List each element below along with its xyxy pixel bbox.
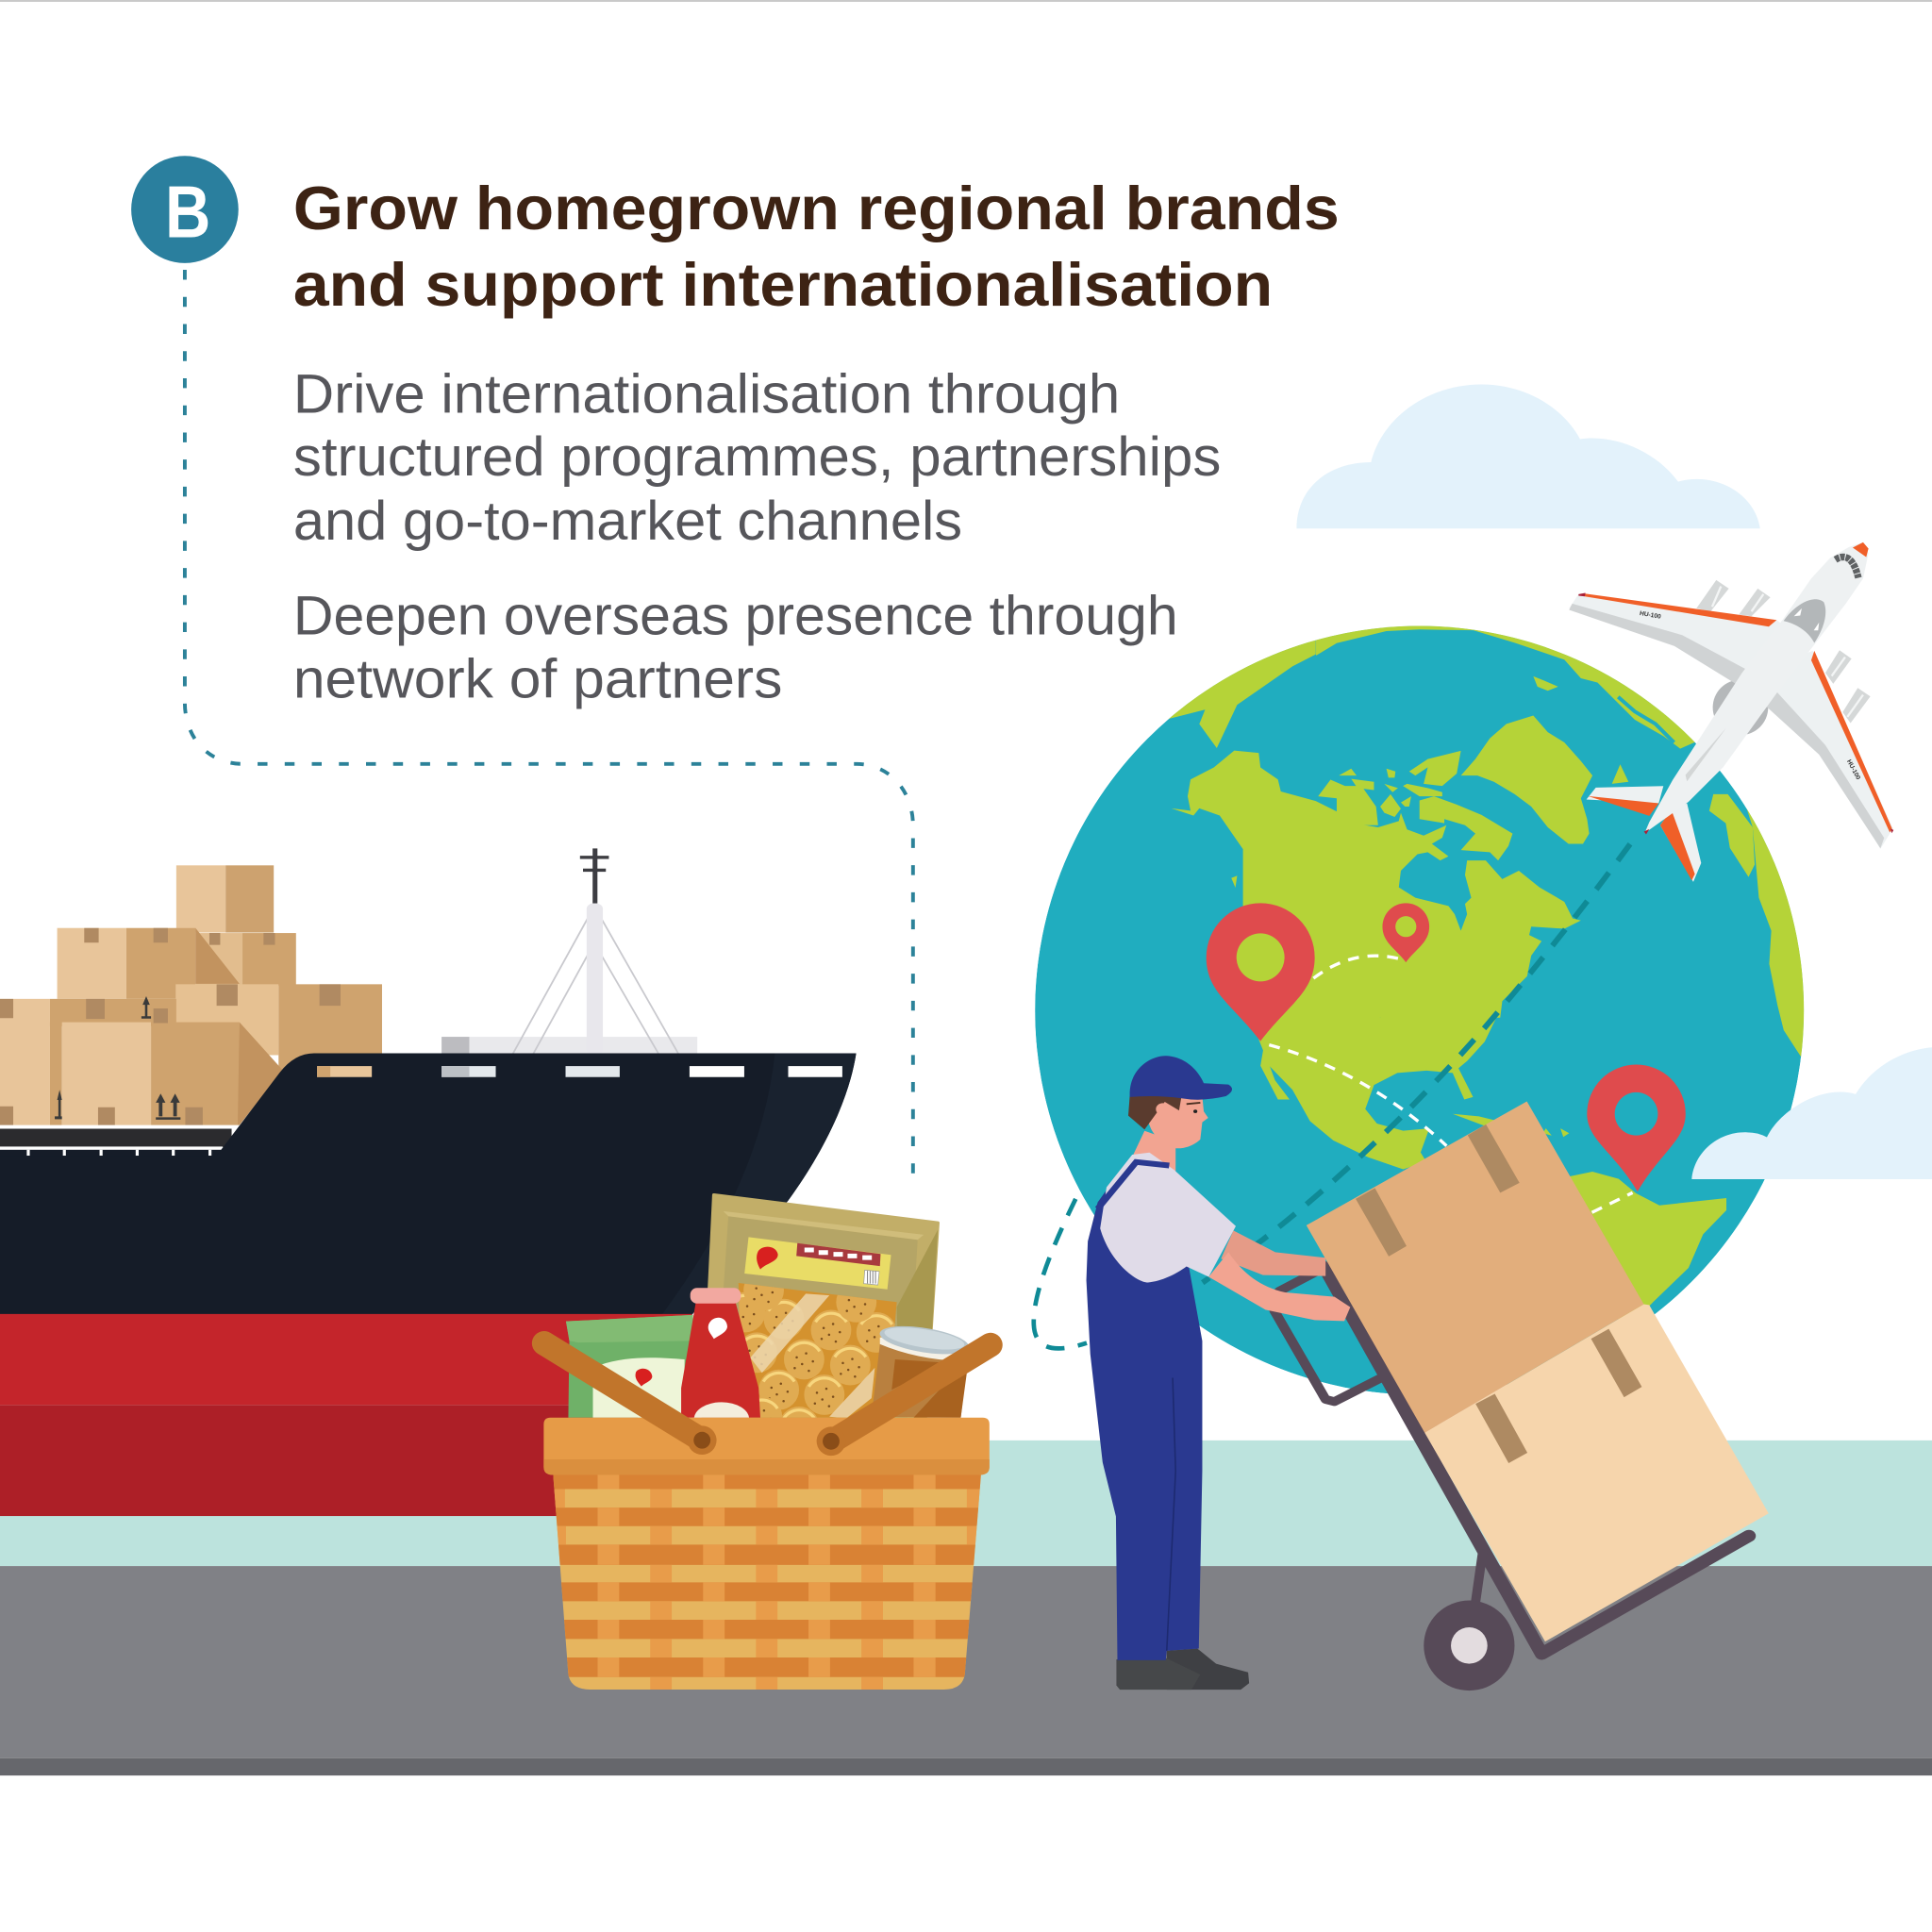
package label (744, 1237, 891, 1290)
red hull band (0, 1314, 691, 1405)
stacked cardboard boxes (0, 865, 382, 1129)
worker (1087, 1056, 1350, 1690)
globe (1035, 595, 1838, 1395)
cap (1130, 1056, 1232, 1100)
picnic basket with food (543, 1195, 991, 1690)
deck railing (0, 1125, 241, 1157)
back arm (1221, 1230, 1325, 1276)
fuselage details (1644, 542, 1869, 835)
location pin: small central (1382, 903, 1429, 962)
quay ground (0, 1566, 1932, 1775)
ocean (1035, 626, 1804, 1395)
teal flight path (1203, 844, 1630, 1283)
basket weave (543, 1474, 991, 1690)
canned food (872, 1321, 971, 1418)
dark red waterline band (0, 1405, 638, 1516)
right wing: HU-100 (1845, 758, 1861, 781)
ship windows (317, 1066, 842, 1077)
left wing (1569, 593, 1809, 684)
airplane (1569, 542, 1893, 882)
neck and face (1128, 1096, 1208, 1174)
upper box (1307, 1102, 1644, 1433)
black hull (0, 1054, 857, 1315)
body text: first point: structured programmes, partnerships (293, 426, 1221, 488)
badge: letter B: B (165, 170, 210, 253)
green snack bag (566, 1315, 693, 1418)
front arm and hand (1208, 1252, 1350, 1321)
engines (1696, 580, 1871, 735)
body text: second point (293, 586, 1178, 709)
biscuit package (703, 1195, 938, 1447)
body text: first point: and go-to-market channels (293, 491, 962, 552)
trouser seam (1167, 1378, 1175, 1651)
basket handles (544, 1343, 991, 1441)
hand trolley with boxes (1274, 1102, 1769, 1690)
overalls (1087, 1161, 1202, 1660)
location pin: south (1587, 1064, 1686, 1191)
biscuit window (739, 1283, 897, 1418)
sauce bottle (681, 1288, 760, 1418)
location pin: large west coast (1207, 903, 1315, 1041)
body text: first point (293, 364, 1221, 552)
overall strap (1098, 1162, 1169, 1208)
flight path loop (1034, 1199, 1087, 1348)
shoes (1116, 1649, 1249, 1690)
heading (293, 174, 1340, 319)
cloud: right side (1691, 1047, 1932, 1179)
fuselage (1644, 542, 1869, 833)
cloud: upper right (1296, 385, 1760, 528)
badge: letter B (131, 156, 239, 263)
trolley frame (1274, 1267, 1749, 1654)
left wing: HU-100 (1639, 610, 1661, 621)
lower box (1424, 1304, 1769, 1641)
heading: Grow homegrown regional brands (293, 174, 1340, 242)
right wing (1764, 651, 1893, 849)
trolley wheel (1424, 1601, 1514, 1690)
heading: and support internationalisation (293, 250, 1273, 319)
continents: Canada, Greenland, Arctic islands, Europe and Africa (1316, 626, 1804, 1057)
continents: west part of North America, Central America, South America (1168, 640, 1726, 1319)
mast and rigging (441, 848, 697, 1055)
shirt (1100, 1153, 1236, 1282)
curved white route dashes (1269, 956, 1633, 1212)
tailplane (1587, 786, 1701, 882)
dashed connector line (185, 270, 913, 1183)
body text: second point: network of partners (293, 648, 782, 709)
water band (0, 1441, 1932, 1566)
basket rim (543, 1418, 990, 1474)
cargo ship (0, 848, 857, 1516)
handle pivots (688, 1425, 845, 1456)
body text: first point: Drive internationalisation through (293, 364, 1120, 425)
body text: second point: Deepen overseas presence through (293, 586, 1178, 647)
bow highlight (662, 1054, 857, 1315)
